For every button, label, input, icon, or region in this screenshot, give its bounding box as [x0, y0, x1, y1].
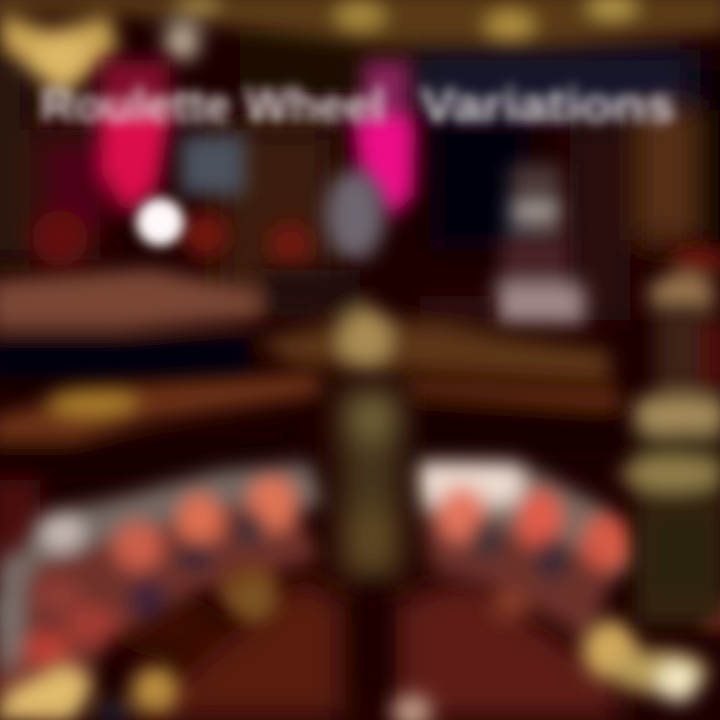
gold accents, bottom	[0, 570, 720, 720]
roulette wheel bowl	[110, 575, 620, 720]
gold chandelier, top left	[0, 12, 118, 98]
wheel pockets, right	[415, 460, 640, 640]
title, blurred: Variations	[420, 79, 675, 133]
counter bands	[0, 268, 610, 385]
title, blurred: Roulette Wheel	[40, 79, 385, 133]
spindle shadow	[358, 590, 388, 690]
title, blurred	[40, 79, 675, 133]
right ornate turret	[620, 246, 720, 625]
silver figures and lights	[180, 135, 585, 324]
wheel pockets, left	[0, 462, 325, 720]
central spindle	[340, 385, 402, 580]
bright white light	[136, 198, 184, 246]
ceiling gold trim	[0, 0, 720, 60]
wheel rim arcs	[0, 372, 625, 580]
crimson and magenta banners	[32, 60, 416, 267]
